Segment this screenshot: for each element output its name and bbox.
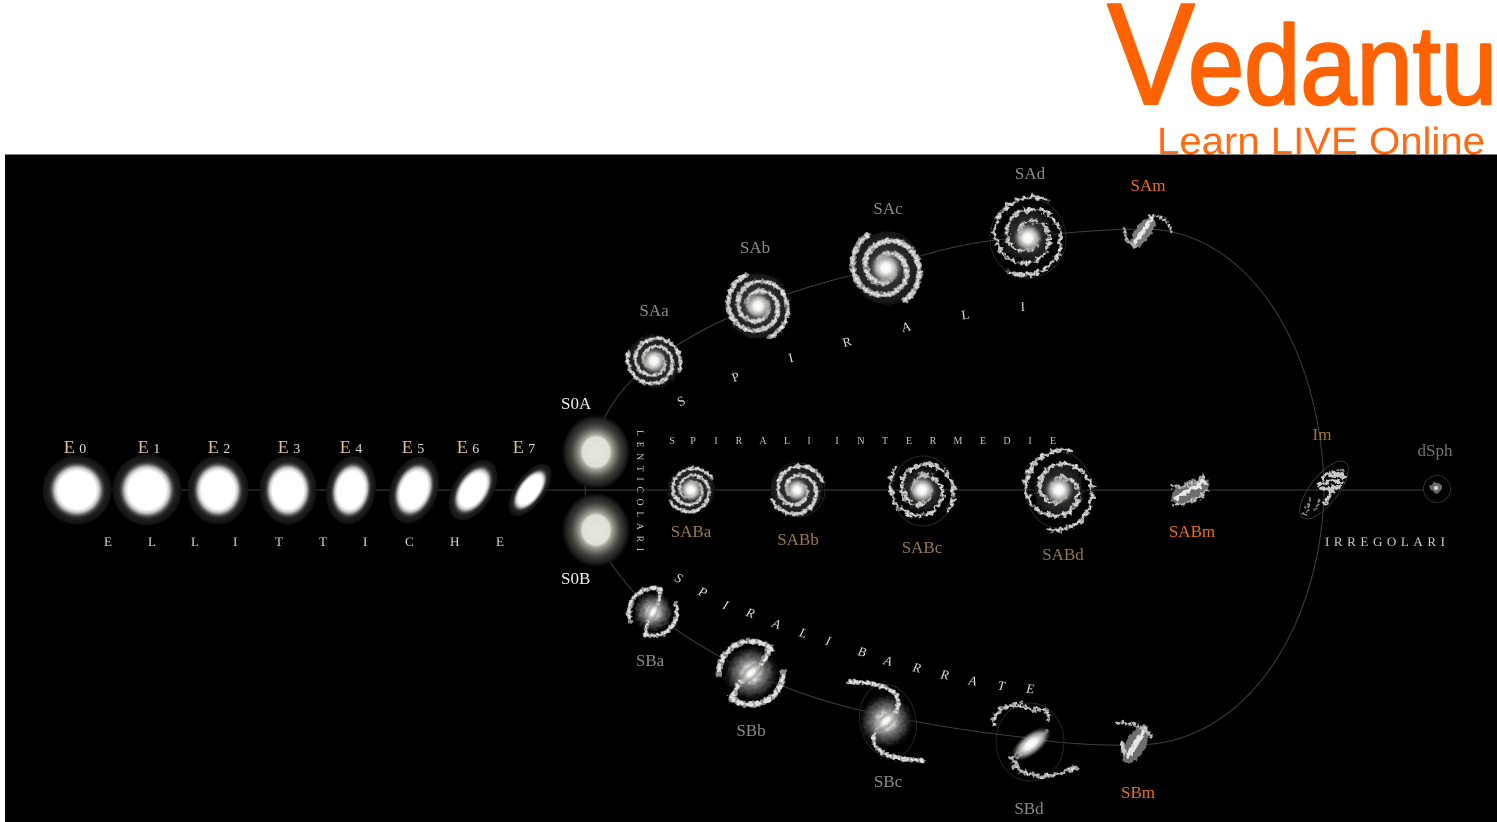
letter A: A	[967, 672, 978, 689]
row: normal spirals	[618, 164, 1172, 397]
label SAm: SAm	[1131, 176, 1165, 195]
galaxy SABc	[878, 446, 966, 534]
label SBc: SBc	[874, 772, 903, 791]
letter R: R	[743, 604, 757, 621]
letter P: P	[695, 583, 710, 600]
letter I: I	[720, 597, 731, 613]
row: intermediate spirals	[658, 425, 1453, 564]
letter I: I	[823, 633, 833, 649]
galaxy E2	[187, 455, 249, 525]
label Im: Im	[1313, 425, 1331, 444]
letter I: I	[1020, 299, 1025, 314]
label SBm: SBm	[1121, 783, 1155, 802]
label E3: E 3	[278, 437, 300, 457]
label E4: E 4	[340, 437, 362, 457]
galaxy SAm	[1124, 213, 1172, 251]
heading: LENTICOLARI: LENTICOLARI	[634, 430, 644, 551]
label E5: E 5	[402, 437, 424, 457]
galaxy SABd	[1016, 442, 1102, 538]
label E0: E 0	[64, 437, 86, 457]
galaxy SAc	[835, 217, 937, 319]
galaxy SBm	[1117, 721, 1155, 767]
label SAc: SAc	[873, 199, 903, 218]
galaxy E6	[438, 451, 508, 529]
galaxy SABb	[762, 455, 832, 525]
label dSph: dSph	[1418, 441, 1453, 460]
label SABb: SABb	[777, 530, 819, 549]
letter P: P	[729, 368, 741, 385]
letter S: S	[675, 393, 688, 409]
label SAa: SAa	[639, 301, 669, 320]
heading: IRREGOLARI: IRREGOLARI	[1325, 534, 1445, 549]
letter S: S	[673, 570, 685, 586]
label SAd: SAd	[1015, 164, 1046, 183]
heading: SPIRALI INTERMEDIE: SPIRALIINTERMEDIE	[669, 436, 1056, 447]
letter A: A	[881, 652, 894, 669]
galaxy SAb	[714, 262, 802, 350]
letter B: B	[856, 643, 868, 660]
galaxy SBc	[849, 679, 923, 763]
letter R: R	[841, 333, 853, 350]
heading: ELLITTICHE: ELLITTICHE	[104, 534, 504, 549]
heading: SPIRALI BARRATE	[673, 570, 1035, 696]
letter A: A	[900, 318, 913, 335]
galaxy E4	[320, 451, 382, 529]
galaxy dSph	[1424, 476, 1450, 502]
galaxy E7	[500, 456, 560, 524]
letter L: L	[797, 624, 809, 641]
letter R: R	[911, 659, 922, 676]
label E6: E 6	[457, 437, 479, 457]
label SABd: SABd	[1042, 545, 1084, 564]
letter E: E	[1025, 681, 1035, 696]
logo tagline: Learn LIVE Online	[1157, 121, 1485, 163]
galaxy SBd	[994, 703, 1078, 781]
elliptical type labels	[64, 437, 535, 457]
galaxy S0B	[562, 493, 630, 567]
galaxy Im	[1291, 454, 1357, 526]
label S0B: S0B	[561, 569, 590, 588]
label SAb: SAb	[740, 238, 770, 257]
label SBa: SBa	[636, 651, 665, 670]
label SBd: SBd	[1014, 799, 1044, 818]
letter T: T	[997, 678, 1007, 693]
connecting lines	[77, 229, 1437, 745]
label E2: E 2	[208, 437, 230, 457]
letter R: R	[939, 666, 950, 683]
label E1: E 1	[138, 437, 160, 457]
galaxy E5	[379, 449, 449, 531]
galaxy SABa	[658, 457, 724, 523]
galaxy E3	[259, 455, 317, 525]
label SABc: SABc	[902, 538, 943, 557]
label E7: E 7	[513, 437, 535, 457]
lenticular galaxies	[561, 394, 630, 588]
elliptical galaxies E0 to E7	[42, 449, 560, 531]
galaxy S0A	[562, 415, 630, 489]
galaxy SBb	[710, 632, 792, 714]
label SABm: SABm	[1169, 522, 1215, 541]
label SBb: SBb	[736, 721, 766, 740]
label SABa: SABa	[671, 522, 712, 541]
galaxy SAa	[618, 325, 690, 397]
row: barred spirals	[629, 588, 1155, 818]
galaxy SAd	[977, 183, 1079, 289]
galaxy SBa	[629, 588, 677, 636]
galaxy E0	[42, 455, 112, 525]
letter L: L	[960, 307, 970, 323]
heading: SPIRALI	[675, 299, 1025, 409]
letter A: A	[769, 615, 783, 632]
letter I: I	[787, 350, 795, 365]
label S0A: S0A	[561, 394, 592, 413]
fork curve joining spirals	[585, 229, 1324, 745]
galaxy E1	[112, 454, 182, 526]
galaxy SABm	[1167, 473, 1213, 509]
horizontal axis	[77, 489, 1437, 491]
logo: Vedantu	[1107, 0, 1497, 135]
